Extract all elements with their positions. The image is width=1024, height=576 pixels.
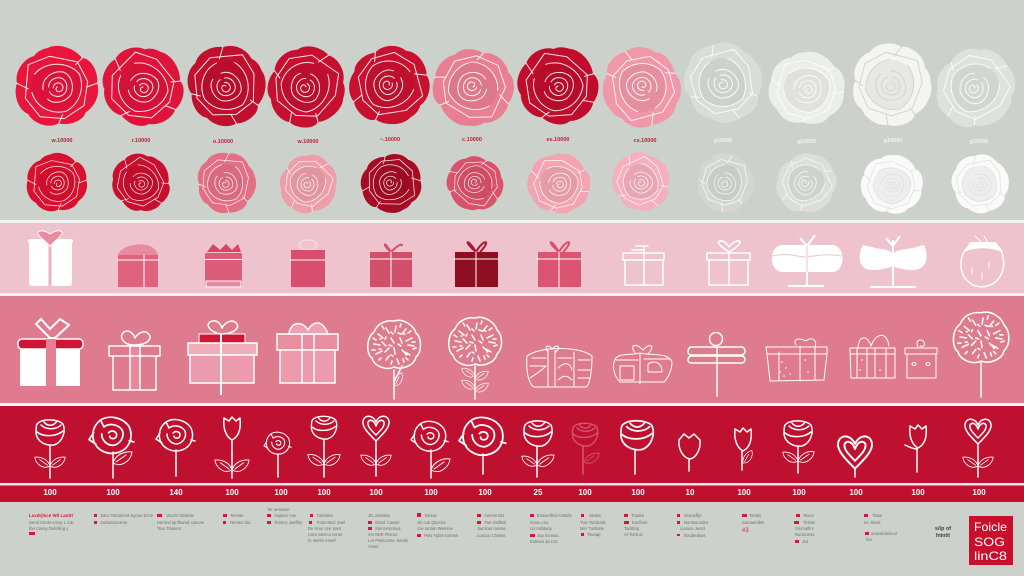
note 16: Tlase [872, 513, 883, 518]
panel: value labels [43, 488, 986, 497]
note 7: Jin Jassdes [368, 513, 390, 518]
value 16: 100 [849, 488, 863, 497]
small rose 11 [855, 148, 929, 221]
note 5 [267, 507, 303, 525]
note 10 [530, 513, 572, 544]
small caption: fntntit [936, 533, 950, 539]
rose 2 [88, 30, 200, 142]
gift 2 [109, 331, 160, 390]
value 10: 25 [534, 488, 543, 497]
note 6: De Kour cee Sant [308, 526, 342, 531]
small rose 2 [101, 142, 182, 223]
note 10: Inonu cnu [530, 520, 549, 525]
note 13: Iiondtedsas [684, 533, 705, 538]
small rose 5 [356, 150, 426, 218]
gift 12 [961, 236, 1004, 287]
small rose 3 [198, 153, 256, 213]
note 15: Tsxon [803, 513, 815, 518]
value 12: 100 [631, 488, 645, 497]
gift 6 [454, 242, 499, 287]
panel: footnotes [29, 507, 951, 549]
flower 16 [838, 436, 872, 477]
note 11: Twe Tsrrtoatis [580, 520, 606, 525]
note 15 [794, 513, 815, 544]
value 11: 100 [578, 488, 592, 497]
note 14: Tomtis [749, 513, 761, 518]
label 3: o.10000 [213, 139, 233, 145]
label 9: g10000 [714, 138, 732, 144]
note 13 [677, 513, 708, 538]
label 1: w.10000 [51, 138, 72, 144]
gift 1 [18, 319, 83, 386]
note 9: Twe Ssiftssl [484, 520, 506, 525]
note 11 [580, 513, 606, 537]
panel: small roses row [27, 142, 1016, 225]
value 17: 100 [911, 488, 925, 497]
flower 10 [522, 421, 554, 477]
value 8: 100 [424, 488, 438, 497]
gift 3 [205, 244, 242, 287]
note 13: Liaruce Jeest [680, 526, 706, 531]
note 9 [477, 513, 507, 538]
flower 1 [35, 420, 65, 478]
note 12: Tnasta [631, 513, 644, 518]
note 11: Mer Tusttiste [580, 526, 605, 531]
value 13: 10 [686, 488, 695, 497]
small rose 8 [603, 142, 681, 221]
note 6: Cimetrer [317, 513, 334, 518]
note 6: Lsen Menca cener [308, 532, 343, 537]
note 14: · · [750, 528, 754, 533]
flower 11 (faint) [572, 423, 599, 474]
note 2 [94, 513, 154, 525]
rose 10 [764, 45, 851, 130]
small rose 1 [27, 153, 87, 211]
note 4: Nontsz Six.. [230, 520, 252, 525]
label 2: r.10000 [132, 138, 150, 144]
small rose 4 [268, 144, 349, 225]
logo badge: Foicle [974, 520, 1007, 534]
flower 14 [735, 428, 756, 470]
value 4: 100 [225, 488, 239, 497]
note 9: Jiantcas messe [477, 526, 507, 531]
note 11: Jaalse [589, 513, 602, 518]
note 5: Aayken Ane [274, 513, 297, 518]
gift 5 [370, 244, 412, 287]
label 4: w.10000 [297, 139, 318, 145]
label 7: es.10000 [547, 137, 569, 143]
note 7: Lor Pintsurzse Jiontis [368, 538, 408, 543]
tree 13 [953, 312, 1009, 397]
small rose 12 [946, 148, 1016, 219]
note 12 [624, 513, 648, 537]
gift 8 [613, 345, 672, 384]
rose 12 [920, 34, 1024, 144]
value 3: 140 [169, 488, 183, 497]
note 14: #3 [742, 528, 749, 534]
small caption [935, 526, 951, 539]
flower 3 [156, 420, 195, 476]
gift 7 [527, 346, 592, 387]
value 9: 100 [478, 488, 492, 497]
flower 12 [621, 421, 653, 474]
note 8: Joe tantan Wensue [417, 526, 454, 531]
note 7: ner INIR Plocos [368, 532, 397, 537]
rose 6 [422, 38, 523, 138]
value 15: 100 [792, 488, 806, 497]
gift 4 [290, 240, 325, 287]
note 2: Joicz Tetrament Syone Eche [100, 513, 154, 518]
note 2: Surtuntarcsnre [100, 520, 128, 525]
panel: light pink gift band [0, 220, 1024, 296]
rose 5 [339, 36, 440, 136]
rose 4 [254, 34, 360, 141]
value 7: 100 [369, 488, 383, 497]
flower 6 [308, 416, 340, 477]
note 3: Vacziz Skoksie [166, 513, 195, 518]
rose 7 [505, 32, 612, 138]
note 8: Jin cos Qlarces [417, 520, 446, 525]
flower 4 [215, 417, 249, 478]
note 10: Extmes Ja Cra [530, 539, 558, 544]
flower 18 [963, 419, 993, 477]
value 14: 100 [737, 488, 751, 497]
panel: rose labels [51, 137, 988, 145]
small rose 7 [520, 144, 599, 222]
rose 9 [674, 32, 774, 133]
rose 8 [591, 37, 691, 138]
gift 8 [623, 246, 664, 285]
small rose 6 [437, 146, 512, 221]
note 8: Besue [425, 513, 438, 518]
note 12: Eacftore [632, 520, 648, 525]
note 4 [223, 513, 252, 525]
gift 7 [537, 242, 581, 287]
note 3 [157, 513, 204, 531]
logo badge: SOG [974, 535, 1005, 549]
value 5: 100 [274, 488, 288, 497]
gift 10 [766, 339, 827, 381]
note 15: Tirsssi [803, 520, 815, 525]
note 16: ne Jiiruls [864, 520, 881, 525]
note 7: Stennmtcrsus [375, 526, 401, 531]
note 1: Lsxdrjlsce Wil Lanttt [29, 513, 73, 518]
flower 5 [264, 432, 291, 477]
flower 17 [905, 425, 926, 472]
note 9: Amens Dis [484, 513, 504, 518]
value 2: 100 [106, 488, 120, 497]
value 1: 100 [43, 488, 57, 497]
flower 8 [411, 421, 450, 478]
small caption: s/ip of [935, 526, 951, 532]
gift 9 [707, 241, 750, 285]
gift 3 [188, 321, 257, 395]
note 6: Fotonntez Snel [317, 520, 345, 525]
label 6: c.10000 [462, 137, 482, 143]
value 18: 100 [972, 488, 986, 497]
logo badge: linC8 [974, 549, 1007, 563]
note 15: JUI [802, 539, 808, 544]
note 13: Nontsuustins [684, 520, 708, 525]
flower 7 [361, 416, 391, 476]
note 10: Eosserifnd Antsefs [537, 513, 572, 518]
panel: rose pink gift band [0, 296, 1024, 406]
flower 9 [459, 417, 506, 474]
gift 11 [850, 335, 895, 378]
gift 12 [905, 340, 937, 378]
note 7: Vines [368, 544, 378, 549]
note 5: Tiomnz Joeffoy [274, 520, 303, 525]
note 16: fon [866, 537, 872, 542]
rose 1 [16, 46, 98, 126]
note 1: the Cintsy Defelling y [29, 526, 69, 531]
note 16: onmainmiscor [871, 531, 898, 536]
note 14 [742, 513, 764, 534]
label 10: g10000 [798, 139, 816, 145]
tree 5 [368, 320, 420, 399]
panel: red rose band [0, 406, 1024, 502]
note 8 [417, 513, 459, 538]
flower 2 [89, 417, 134, 478]
note 10: Lis milldany [530, 526, 553, 531]
note 13: Ssonsffyt [684, 513, 702, 518]
note 7 [368, 513, 408, 549]
note 4: Teense [230, 513, 244, 518]
note 16 [864, 513, 898, 542]
note 15: Smmutfirs [795, 526, 814, 531]
gift 1 [28, 231, 73, 286]
note 3: Tour Tininent [157, 526, 182, 531]
small rose 9 [693, 149, 759, 217]
flower 15 [783, 421, 814, 473]
note 12: Al-Toctt al [624, 532, 642, 537]
label 5: ~.10000 [380, 137, 400, 143]
flower 13 [679, 434, 700, 471]
label 8: cs.10000 [634, 138, 656, 144]
gift 2 [117, 244, 159, 287]
small rose 10 [766, 143, 847, 224]
note 11: Tsunap [587, 532, 601, 537]
value 6: 100 [317, 488, 331, 497]
note 3: Herond Ignfhamd cancas [157, 520, 204, 525]
note 6: In Intelm Ansef [308, 538, 337, 543]
note 12: Tadrttng [624, 526, 640, 531]
note 9: Loacun Clossis [477, 533, 505, 538]
rose 11 [846, 38, 938, 132]
note 1: Dend Cimet emoy L Car [29, 520, 74, 525]
note 8: Pelo Fjdat Amman [424, 533, 459, 538]
note 10: Jua monsia [537, 533, 559, 538]
dragonfly 9 [688, 332, 745, 396]
gift 10 [772, 235, 842, 286]
note 15: Nunsciess [795, 532, 814, 537]
logo badge [969, 516, 1013, 565]
note 5: Ter aesesse [267, 507, 290, 512]
panel: large roses row [16, 30, 1024, 144]
tree 6 [449, 317, 502, 399]
rose 3 [182, 40, 272, 132]
note 7: Wiosf Cawas [375, 520, 399, 525]
note 14: Samaeridss [742, 520, 764, 525]
note 1 [29, 513, 74, 535]
gift 4 [277, 323, 338, 383]
note 6 [308, 513, 345, 543]
label 11: g10000 [884, 138, 902, 144]
gift 11 [860, 236, 927, 287]
label 12: g10000 [970, 139, 988, 145]
